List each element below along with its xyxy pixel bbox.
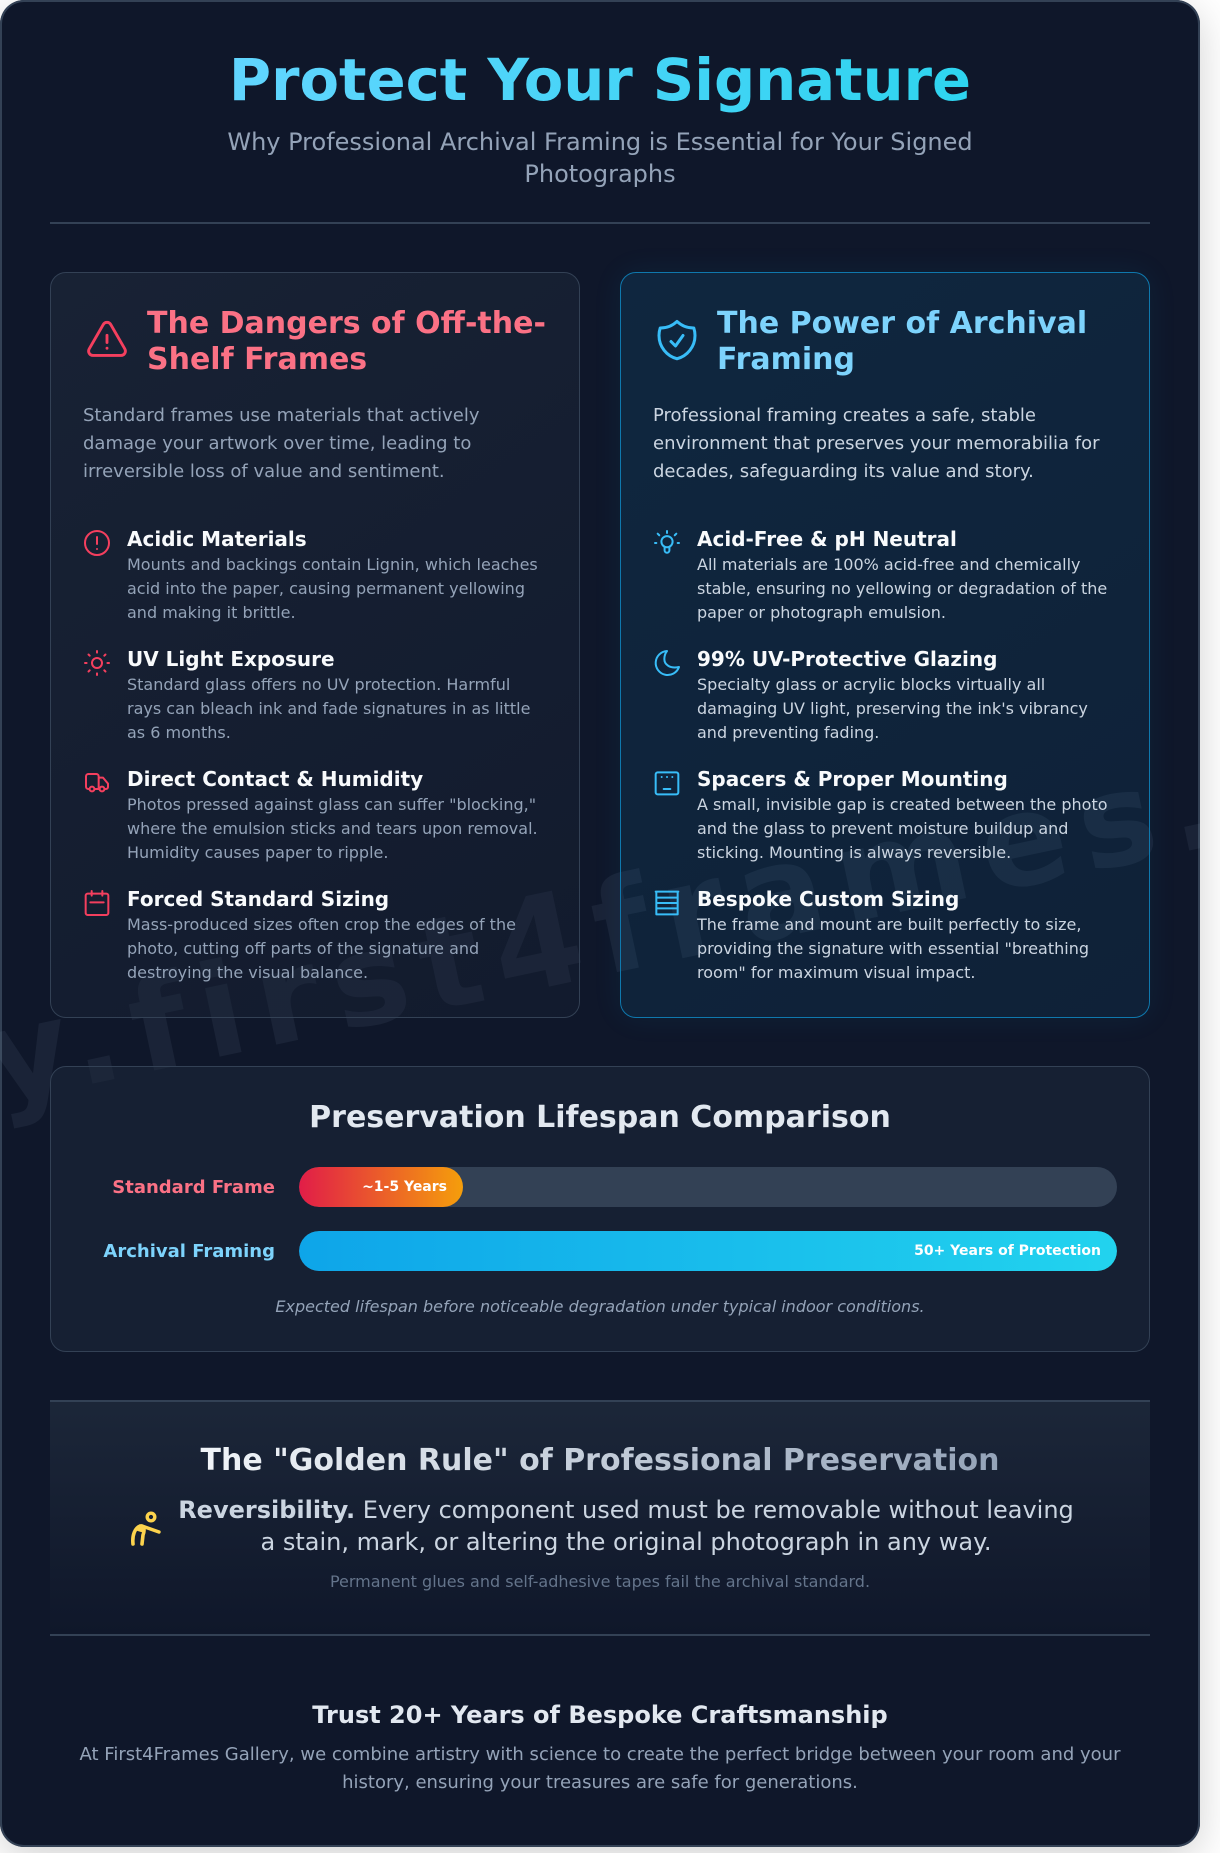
item: acid-free: All materials are 100% acid-free and chemically bbox=[697, 555, 1080, 574]
label: archival framing: Archival Framing bbox=[103, 1241, 275, 1262]
heading: dangers bbox=[147, 306, 546, 377]
icon: person bbox=[131, 1512, 161, 1546]
footer heading: Trust 20+ Years of Bespoke Craftsmanship bbox=[312, 1701, 888, 1729]
item: spacers and mounting: sticking. Mounting is always reversible. bbox=[697, 843, 1011, 862]
fine print: Permanent glues and self-adhesive tapes fail the archival standard. bbox=[330, 1572, 870, 1591]
bar: standard frame bbox=[299, 1167, 1117, 1207]
icon: shield check bbox=[658, 320, 696, 360]
subtitle bbox=[227, 128, 973, 188]
heading: power: The Power of Archival bbox=[717, 306, 1087, 341]
panel: power of archival framing bbox=[620, 272, 1150, 1018]
item: acidic materials: Mounts and backings contain Lignin, which leaches bbox=[127, 555, 538, 574]
intro text: decades, safeguarding its value and story. bbox=[653, 461, 1034, 482]
item: spacers and mounting: Spacers & Proper Mounting bbox=[697, 767, 1008, 791]
item: direct contact and humidity: Humidity causes paper to ripple. bbox=[127, 843, 388, 862]
item: uv light exposure: as 6 months. bbox=[127, 723, 231, 742]
intro text: irreversible loss of value and sentiment. bbox=[83, 461, 445, 482]
panel: dangers of off-the-shelf frames bbox=[50, 272, 580, 1018]
icon: warning triangle bbox=[87, 320, 127, 357]
intro text: damage your artwork over time, leading to bbox=[83, 433, 471, 454]
label: standard frame: Standard Frame bbox=[112, 1177, 275, 1198]
item: direct contact and humidity bbox=[85, 767, 538, 862]
footer text: history, ensuring your treasures are safe for generations. bbox=[342, 1772, 858, 1793]
item: uv-protective glazing: and preventing fading. bbox=[697, 723, 879, 742]
bar: archival framing bbox=[299, 1231, 1117, 1271]
intro text: environment that preserves your memorabilia for bbox=[653, 433, 1100, 454]
subtitle: Photographs bbox=[524, 160, 676, 188]
rule text: Reversibility. Every component used must be removable without leaving bbox=[178, 1496, 1074, 1524]
item: bespoke custom sizing: providing the signature with essential "breathing bbox=[697, 939, 1089, 958]
item: acid-free: paper or photograph emulsion. bbox=[697, 603, 946, 622]
item: uv-protective glazing: damaging UV light, preserving the ink's vibrancy bbox=[697, 699, 1088, 718]
item: acid-free: Acid-Free & pH Neutral bbox=[697, 527, 957, 551]
item: bespoke custom sizing: Bespoke Custom Sizing bbox=[697, 887, 959, 911]
heading: power bbox=[717, 306, 1087, 377]
item: forced standard sizing: photo, cutting off parts of the signature and bbox=[127, 939, 479, 958]
heading: golden rule: The "Golden Rule" of Professional Preservation bbox=[201, 1443, 999, 1478]
item: bespoke custom sizing: room" for maximum visual impact. bbox=[697, 963, 976, 982]
item: uv-protective glazing: Specialty glass or acrylic blocks virtually all bbox=[697, 675, 1045, 694]
bar: archival framing: 50+ Years of Protection bbox=[914, 1243, 1101, 1259]
intro text: Standard frames use materials that actively bbox=[83, 405, 480, 426]
item: acid-free: stable, ensuring no yellowing or degradation of the bbox=[697, 579, 1107, 598]
rule text bbox=[178, 1496, 1074, 1556]
item: uv light exposure bbox=[84, 647, 530, 742]
item: direct contact and humidity: Photos pressed against glass can suffer "blocking," bbox=[127, 795, 536, 814]
item: acid-free bbox=[654, 527, 1107, 622]
item: acidic materials: and making it brittle. bbox=[127, 603, 296, 622]
intro text: Professional framing creates a safe, stable bbox=[653, 405, 1036, 426]
item: forced standard sizing bbox=[84, 887, 516, 982]
footer text: At First4Frames Gallery, we combine artistry with science to create the perfect bridge between your room and your bbox=[80, 1744, 1120, 1765]
item: bespoke custom sizing bbox=[654, 887, 1089, 982]
item: uv-protective glazing: 99% UV-Protective Glazing bbox=[697, 647, 997, 671]
panel: golden rule bbox=[50, 1400, 1150, 1636]
item: spacers and mounting: A small, invisible gap is created between the photo bbox=[697, 795, 1108, 814]
intro text bbox=[83, 405, 480, 482]
item: uv light exposure: Standard glass offers no UV protection. Harmful bbox=[127, 675, 510, 694]
item: forced standard sizing: Mass-produced sizes often crop the edges of the bbox=[127, 915, 516, 934]
item: direct contact and humidity: Direct Contact & Humidity bbox=[127, 767, 423, 791]
item: uv light exposure: UV Light Exposure bbox=[127, 647, 335, 671]
title: Protect Your Signature bbox=[229, 47, 971, 114]
item: acidic materials: Acidic Materials bbox=[127, 527, 307, 551]
item: direct contact and humidity: where the emulsion sticks and tears upon removal. bbox=[127, 819, 538, 838]
item: acidic materials bbox=[84, 527, 538, 622]
item: forced standard sizing: destroying the visual balance. bbox=[127, 963, 368, 982]
intro text bbox=[653, 405, 1100, 482]
item: uv light exposure: rays can bleach ink and fade signatures in as little bbox=[127, 699, 530, 718]
chart note: Expected lifespan before noticeable degradation under typical indoor conditions. bbox=[275, 1297, 925, 1316]
item: bespoke custom sizing: The frame and mount are built perfectly to size, bbox=[697, 915, 1081, 934]
item: spacers and mounting: and the glass to prevent moisture buildup and bbox=[697, 819, 1068, 838]
item: acidic materials: acid into the paper, causing permanent yellowing bbox=[127, 579, 525, 598]
panel: lifespan comparison bbox=[50, 1066, 1150, 1352]
bar: standard frame: ~1-5 Years bbox=[362, 1179, 447, 1195]
item: spacers and mounting bbox=[654, 767, 1108, 862]
heading: power: Framing bbox=[717, 342, 855, 377]
subtitle: Why Professional Archival Framing is Essential for Your Signed bbox=[227, 128, 973, 156]
heading: lifespan comparison: Preservation Lifespan Comparison bbox=[309, 1100, 891, 1135]
item: forced standard sizing: Forced Standard Sizing bbox=[127, 887, 389, 911]
rule text: a stain, mark, or altering the original photograph in any way. bbox=[260, 1528, 992, 1556]
item: uv-protective glazing bbox=[654, 647, 1088, 742]
heading: dangers: Shelf Frames bbox=[147, 342, 367, 377]
footer text bbox=[80, 1744, 1120, 1793]
heading: dangers: The Dangers of Off-the- bbox=[147, 306, 546, 341]
